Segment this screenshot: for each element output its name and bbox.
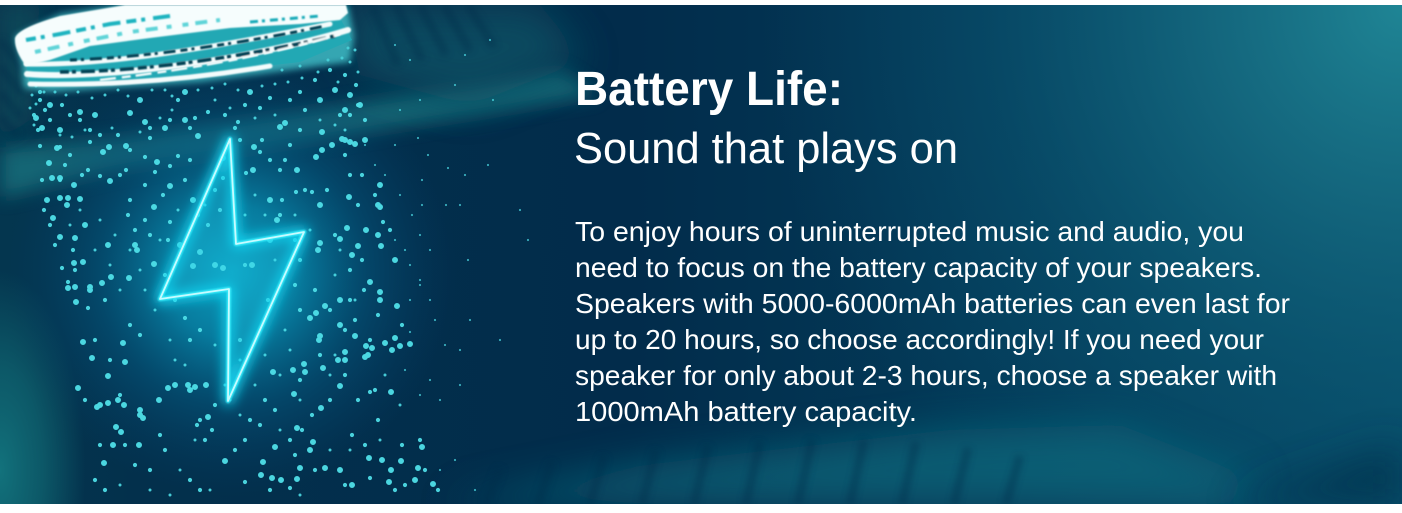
body paragraph: speaker for only about 2-3 hours, choose a speaker with <box>575 360 1277 391</box>
battery top rings <box>15 5 354 92</box>
ring glow <box>15 5 354 92</box>
body paragraph: 1000mAh battery capacity. <box>575 396 917 427</box>
heading line: Sound that plays on: Sound that plays on <box>574 124 958 173</box>
body paragraph: Speakers with 5000-6000mAh batteries can even last for <box>575 288 1290 319</box>
white upper ring <box>15 5 348 66</box>
ring speckle texture <box>26 16 340 80</box>
lower white ring bands <box>26 24 348 84</box>
icon: neon lightning bolt <box>160 139 304 401</box>
body paragraph: need to focus on the battery capacity of your speakers. <box>575 252 1262 283</box>
heading <box>574 63 958 173</box>
speckled ring interior <box>22 18 352 84</box>
body paragraph <box>575 216 1290 427</box>
body paragraph: up to 20 hours, so choose accordingly! If you need your <box>575 324 1264 355</box>
heading line: Battery Life: Battery Life: <box>575 63 843 116</box>
body paragraph: To enjoy hours of uninterrupted music and audio, you <box>575 216 1244 247</box>
battery particle dots <box>30 40 528 495</box>
